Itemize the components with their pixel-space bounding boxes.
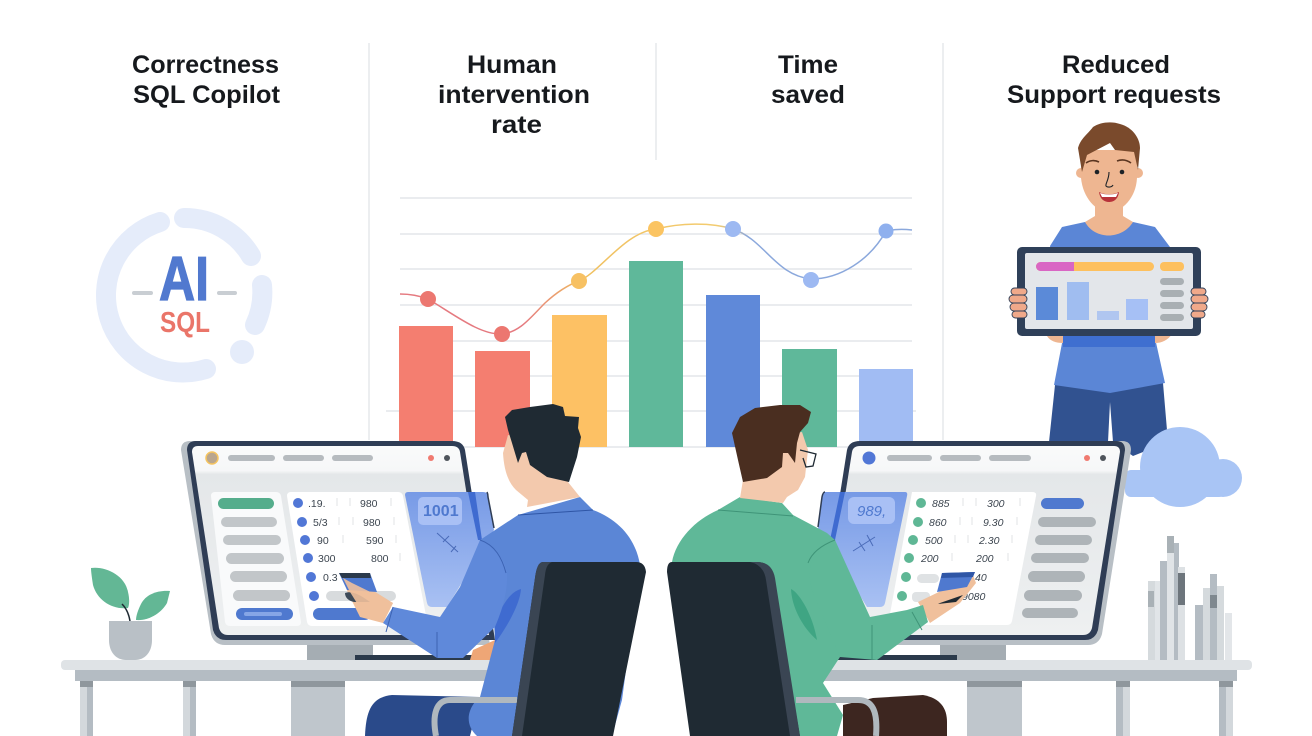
keyboards xyxy=(355,655,957,660)
heading: Human intervention rate: intervention xyxy=(438,81,590,109)
screen: 9080 xyxy=(962,591,986,603)
icon: AI SQL ring badge xyxy=(106,218,262,373)
screen: 800 xyxy=(371,553,389,565)
floating blue data panel: 989, xyxy=(857,503,886,520)
heading: Reduced Support requests: Support requests xyxy=(1007,81,1221,109)
torso and shirt xyxy=(469,497,640,736)
chair armrest xyxy=(435,700,517,736)
hair xyxy=(732,405,811,482)
screen: 200 xyxy=(975,553,994,565)
chair xyxy=(667,562,800,736)
line chart xyxy=(400,221,912,342)
desk xyxy=(61,660,1252,736)
chair armrest xyxy=(796,700,876,736)
arm and hand xyxy=(808,540,976,660)
screen xyxy=(823,446,1120,635)
left seated person xyxy=(339,404,646,736)
heading: Correctness SQL Copilot: Correctness xyxy=(132,51,279,79)
neck and face xyxy=(740,432,808,503)
screen: 40 xyxy=(975,572,987,584)
screen: 9.30 xyxy=(983,517,1004,529)
screen: 500 xyxy=(925,535,943,547)
heading: Human intervention rate xyxy=(438,51,590,139)
decorative skyline of bars xyxy=(1148,536,1232,660)
right monitor xyxy=(817,441,1131,660)
screen: 5/3 xyxy=(313,517,328,529)
chart: bars with trend line xyxy=(386,198,916,447)
heading: Human intervention rate: rate xyxy=(491,111,542,139)
head xyxy=(1076,122,1143,212)
neck and face xyxy=(503,435,580,507)
floating blue data panel xyxy=(405,492,494,607)
screen: 200 xyxy=(920,553,939,565)
icon: AI SQL ring badge: AI xyxy=(159,245,209,314)
floating blue data panel: 1001 xyxy=(423,503,459,520)
screen: 590 xyxy=(366,535,384,547)
screen: .19. xyxy=(308,498,326,510)
screen: 300 xyxy=(318,553,336,565)
heading: Reduced Support requests xyxy=(1007,51,1221,109)
heading: Correctness SQL Copilot: SQL Copilot xyxy=(133,81,281,109)
standing person holding tablet xyxy=(1009,122,1208,456)
screen xyxy=(192,446,489,635)
screen: 90 xyxy=(317,535,329,547)
left monitor xyxy=(181,441,495,660)
screen: 300 xyxy=(987,498,1005,510)
heading: Time saved: Time xyxy=(778,51,838,79)
screen: 860 xyxy=(929,517,947,529)
trousers xyxy=(365,695,480,736)
hands xyxy=(1009,288,1208,318)
hair xyxy=(505,404,581,482)
floating blue data panel xyxy=(818,492,907,607)
tablet xyxy=(1017,247,1201,336)
glasses xyxy=(800,450,816,467)
cloud xyxy=(1125,427,1242,507)
screen: 0.3 xyxy=(323,572,338,584)
heading: Human intervention rate: Human xyxy=(467,51,557,79)
bar chart xyxy=(399,261,913,447)
chair xyxy=(512,562,646,736)
icon: AI SQL ring badge: SQL xyxy=(160,307,210,339)
heading: Reduced Support requests: Reduced xyxy=(1062,51,1170,79)
heading: Correctness SQL Copilot xyxy=(132,51,281,109)
plant xyxy=(91,568,170,660)
screen: 980 xyxy=(360,498,378,510)
right seated person xyxy=(667,405,976,736)
torso and shirt xyxy=(672,497,843,736)
screen: 980 xyxy=(363,517,381,529)
heading: Time saved: saved xyxy=(771,81,845,109)
screen: 885 xyxy=(932,498,950,510)
screen: 2.30 xyxy=(978,535,1000,547)
heading: Time saved xyxy=(771,51,845,109)
trousers xyxy=(843,695,947,736)
arm and hand xyxy=(339,540,507,658)
